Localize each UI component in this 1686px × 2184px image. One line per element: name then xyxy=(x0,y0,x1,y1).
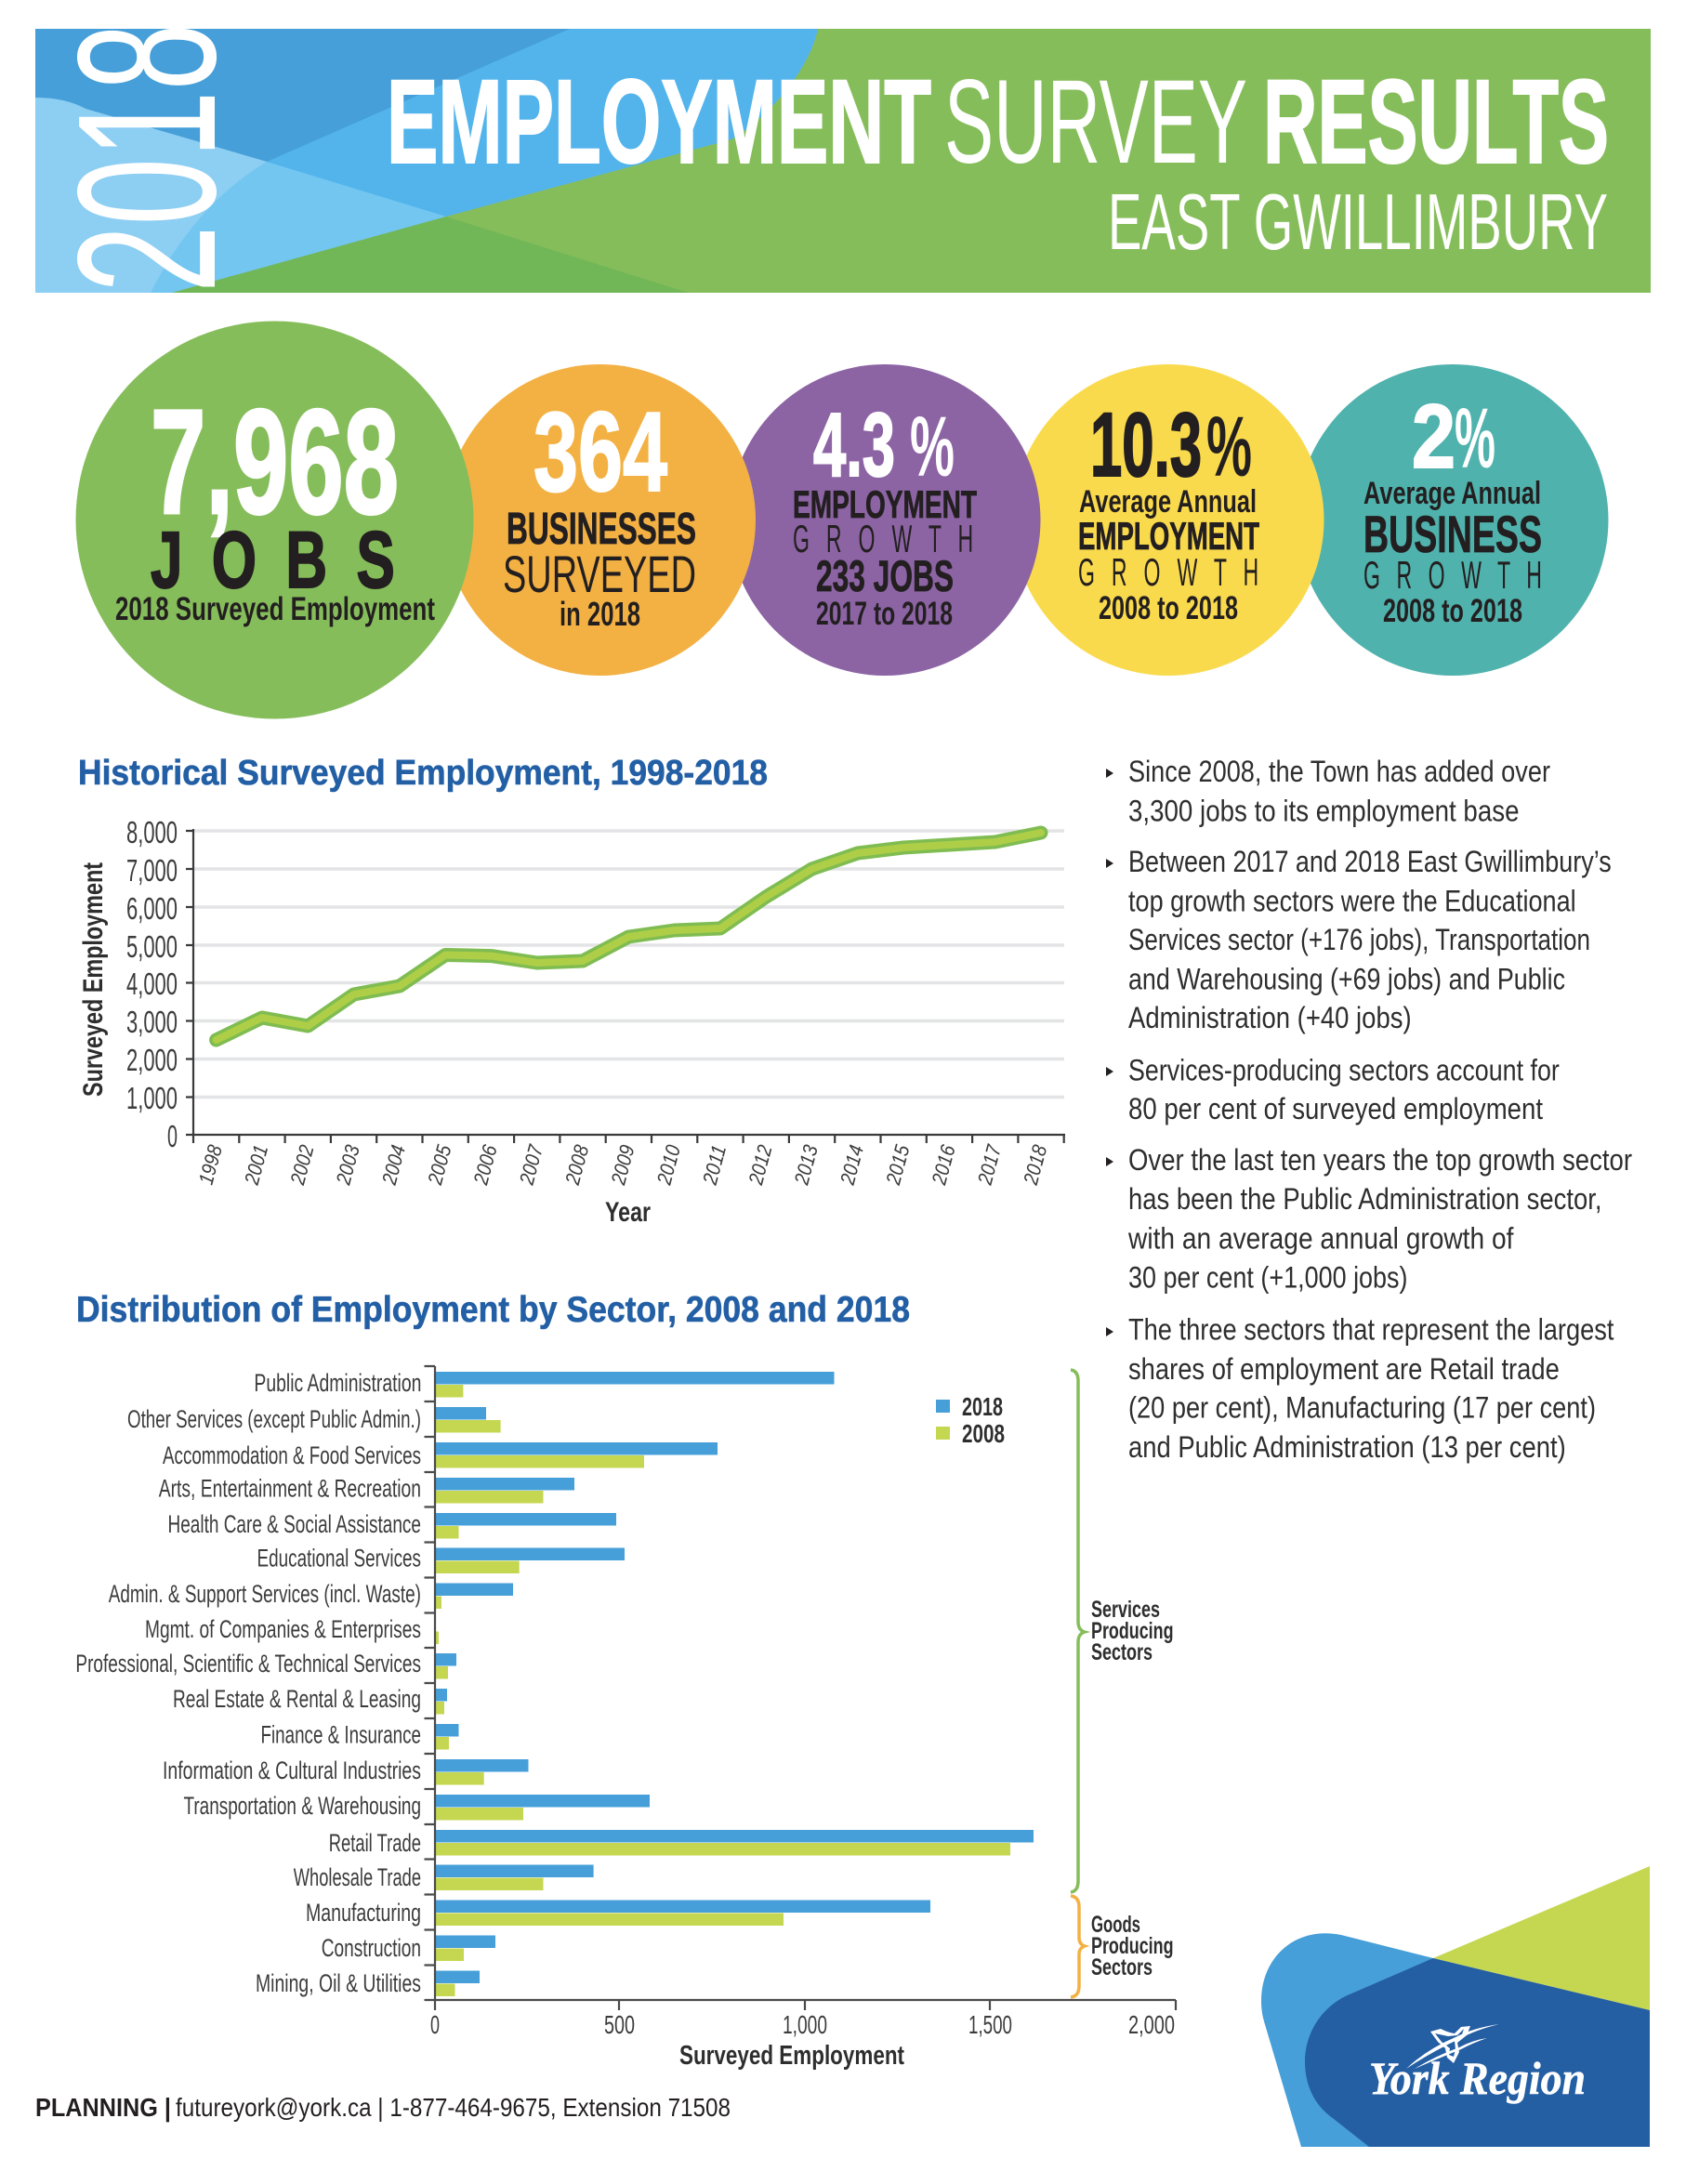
bullet 1: 3,300 jobs to its employment base xyxy=(1128,794,1519,827)
stat circle: businesses surveyed xyxy=(444,364,756,676)
x axis year labels: 2018 xyxy=(1019,1142,1052,1188)
y axis labels: 6,000 xyxy=(126,891,178,926)
x axis year labels: 2009 xyxy=(606,1142,639,1188)
sector labels: Wholesale Trade xyxy=(294,1863,421,1891)
x axis tick labels: 1,500 xyxy=(968,2010,1012,2039)
sector labels: Mgmt. of Companies & Enterprises xyxy=(145,1615,421,1643)
bullet 3: 80 per cent of surveyed employment xyxy=(1128,1092,1543,1125)
stat circle: employment growth 1 year: G R O W T H xyxy=(793,518,973,561)
y axis labels: 0 xyxy=(167,1119,178,1153)
y axis labels: 4,000 xyxy=(126,967,178,1001)
x axis title: Year xyxy=(605,1197,651,1228)
bullet 4: with an average annual growth of xyxy=(1127,1222,1513,1256)
stat circle: total jobs xyxy=(76,322,474,719)
sector labels: Professional, Scientific & Technical Services xyxy=(75,1650,421,1677)
stat circle: total jobs: 2018 Surveyed Employment xyxy=(115,591,435,627)
x axis year labels: 2003 xyxy=(331,1142,364,1188)
sector labels: Construction xyxy=(322,1934,421,1962)
sector labels xyxy=(75,1369,421,1997)
bullet 3: Services-producing sectors account for xyxy=(1128,1053,1560,1086)
x axis year labels: 2015 xyxy=(881,1142,915,1188)
y axis labels xyxy=(126,815,178,1153)
legend: 2008 xyxy=(962,1419,1005,1448)
sector labels: Real Estate & Rental & Leasing xyxy=(173,1685,421,1713)
title: SURVEY xyxy=(944,56,1247,189)
bullet list of key findings xyxy=(1106,755,1632,1464)
stat circle: employment growth 10 year: Average Annual xyxy=(1079,484,1257,520)
stat circle: employment growth 1 year: 4.3 xyxy=(813,394,895,495)
bars 2018 xyxy=(435,1372,1034,1983)
sector labels: Other Services (except Public Admin.) xyxy=(127,1405,421,1433)
employment line xyxy=(217,833,1041,1040)
y axis labels: 8,000 xyxy=(126,815,178,849)
x axis year labels: 2006 xyxy=(468,1142,502,1188)
sector labels: Health Care & Social Assistance xyxy=(167,1510,421,1538)
x axis year labels: 2008 xyxy=(560,1142,594,1188)
x axis year labels: 2013 xyxy=(789,1142,823,1188)
stat circle: business growth: G R O W T H xyxy=(1363,554,1542,598)
brace: goods producing sectors: Sectors xyxy=(1091,1954,1153,1980)
x axis tick labels: 2,000 xyxy=(1128,2010,1175,2039)
stat circle: employment growth 10 year: 2008 to 2018 xyxy=(1099,590,1238,626)
bullet 1: Since 2008, the Town has added over xyxy=(1128,755,1550,788)
stat circle: employment growth 10 year: % xyxy=(1206,400,1252,494)
brace: goods producing sectors: Producing xyxy=(1091,1933,1173,1959)
stat circle: employment growth 10 year: G R O W T H xyxy=(1078,551,1258,595)
footer contact line: PLANNING | xyxy=(35,2093,171,2122)
x axis year labels: 1998 xyxy=(194,1142,227,1187)
y axis labels: 7,000 xyxy=(126,853,178,888)
bars 2008 xyxy=(435,1385,1010,1996)
bullet 2: Administration (+40 jobs) xyxy=(1128,1001,1412,1034)
sector labels: Mining, Oil & Utilities xyxy=(256,1969,421,1997)
x axis tick labels: 0 xyxy=(430,2010,440,2039)
bullet 5: shares of employment are Retail trade xyxy=(1128,1352,1560,1386)
sector labels: Information & Cultural Industries xyxy=(163,1756,421,1784)
sector labels: Retail Trade xyxy=(329,1829,421,1857)
brace: goods producing sectors xyxy=(1071,1896,1173,1997)
stat circle: business growth: 2008 to 2018 xyxy=(1383,593,1522,629)
bullet 5: (20 per cent), Manufacturing (17 per cent) xyxy=(1128,1391,1596,1425)
line chart: historical surveyed employment xyxy=(78,815,1065,1228)
bullet 2: Between 2017 and 2018 East Gwillimbury’s xyxy=(1128,845,1612,878)
bullet 4: 30 per cent (+1,000 jobs) xyxy=(1128,1260,1407,1294)
brace: services producing sectors xyxy=(1071,1370,1173,1892)
brace: goods producing sectors: Goods xyxy=(1091,1912,1140,1938)
title xyxy=(387,56,1609,189)
legend xyxy=(936,1392,1005,1448)
bullet 5: and Public Administration (13 per cent) xyxy=(1128,1430,1566,1464)
title: EMPLOYMENT xyxy=(387,56,931,189)
bar chart: employment by sector xyxy=(75,1366,1176,2071)
stat circle: employment growth 1 year: 2017 to 2018 xyxy=(816,596,953,632)
sector labels: Public Administration xyxy=(254,1369,421,1397)
heading: distribution by sector: Distribution of Employment by Sector, 2008 and 2018 xyxy=(76,1290,910,1330)
stat circle: employment growth 1 year: 233 JOBS xyxy=(816,551,954,600)
bullet 2 xyxy=(1106,845,1612,1034)
x axis title: Surveyed Employment xyxy=(679,2041,904,2071)
sector labels: Transportation & Warehousing xyxy=(184,1792,421,1820)
brace: services producing sectors: Services xyxy=(1091,1597,1160,1623)
stat circle: business growth: % xyxy=(1455,391,1495,486)
stat circle: employment growth 10 year: EMPLOYMENT xyxy=(1078,514,1259,558)
logo shapes xyxy=(1261,1866,1650,2147)
bullet 2: and Warehousing (+69 jobs) and Public xyxy=(1128,963,1565,996)
stat circle: total jobs: 7,968 xyxy=(151,378,399,545)
logo wordmark: York Region xyxy=(1369,2052,1586,2104)
x axis year labels: 2012 xyxy=(744,1142,777,1188)
logo star swoosh xyxy=(1406,2024,1499,2069)
x axis year labels: 2002 xyxy=(285,1142,319,1188)
stat circle: business growth: BUSINESS xyxy=(1363,505,1542,563)
sector labels: Manufacturing xyxy=(306,1899,421,1927)
stat circle: total jobs: J O B S xyxy=(151,515,395,604)
x axis year labels: 2011 xyxy=(698,1142,731,1188)
stat circle: employment growth 10 year xyxy=(1013,364,1324,676)
y axis labels: 2,000 xyxy=(126,1043,178,1077)
bullet 4 xyxy=(1106,1143,1632,1294)
sector labels: Educational Services xyxy=(257,1545,421,1572)
x axis tick labels: 500 xyxy=(604,2010,635,2039)
sector labels: Accommodation & Food Services xyxy=(163,1441,421,1469)
stat circle: business growth xyxy=(1297,364,1608,676)
x axis year labels xyxy=(194,1142,1052,1188)
bullet 4: has been the Public Administration sector, xyxy=(1128,1182,1602,1216)
sector labels: Finance & Insurance xyxy=(260,1721,421,1749)
x axis year labels: 2004 xyxy=(377,1142,410,1188)
bullet 2: Services sector (+176 jobs), Transportation xyxy=(1128,923,1590,956)
x axis year labels: 2005 xyxy=(423,1142,456,1188)
stat circle: businesses surveyed: SURVEYED xyxy=(503,545,696,603)
stat circle: employment growth 10 year: 10.3 xyxy=(1090,394,1202,495)
x axis tick labels xyxy=(430,2010,1175,2039)
bullet 5: The three sectors that represent the largest xyxy=(1128,1312,1614,1346)
stat circle: business growth: 2 xyxy=(1412,386,1455,487)
bullet 2: top growth sectors were the Educational xyxy=(1128,884,1576,917)
x axis year labels: 2007 xyxy=(515,1142,547,1188)
legend: 2018 xyxy=(962,1392,1003,1421)
bullet 5 xyxy=(1106,1312,1614,1464)
bullet 1 xyxy=(1106,755,1550,827)
header banner xyxy=(35,23,1651,293)
x axis year labels: 2010 xyxy=(652,1142,685,1188)
y axis labels: 5,000 xyxy=(126,929,178,964)
x axis year labels: 2017 xyxy=(973,1142,1006,1188)
stat circle: businesses surveyed: in 2018 xyxy=(560,595,640,633)
footer contact line: futureyork@york.ca | 1-877-464-9675, Extension 71508 xyxy=(176,2093,731,2122)
stat circle: businesses surveyed: 364 xyxy=(533,388,667,515)
sector labels: Arts, Entertainment & Recreation xyxy=(159,1475,421,1503)
stat circle: employment growth 1 year xyxy=(729,364,1041,676)
x axis year labels: 2014 xyxy=(836,1142,868,1188)
stat circle: business growth: Average Annual xyxy=(1363,476,1541,511)
stat circle: employment growth 1 year: EMPLOYMENT xyxy=(793,482,977,526)
heading: historical employment: Historical Surveyed Employment, 1998-2018 xyxy=(78,754,768,793)
sector labels: Admin. & Support Services (incl. Waste) xyxy=(109,1580,421,1608)
x axis tick labels: 1,000 xyxy=(783,2010,827,2039)
y axis labels: 1,000 xyxy=(126,1081,178,1115)
stat circle: businesses surveyed: BUSINESSES xyxy=(507,505,696,554)
stat circle: employment growth 1 year: % xyxy=(910,400,955,494)
York Region logo xyxy=(1261,1866,1650,2147)
y axis labels: 3,000 xyxy=(126,1005,178,1039)
axes xyxy=(424,1366,1176,2010)
x axis year labels: 2001 xyxy=(240,1142,272,1188)
brace: services producing sectors: Sectors xyxy=(1091,1639,1153,1665)
brace: services producing sectors: Producing xyxy=(1091,1618,1173,1644)
y axis title: Surveyed Employment xyxy=(78,862,109,1097)
x axis year labels: 2016 xyxy=(927,1142,960,1188)
bullet 3 xyxy=(1106,1053,1560,1125)
